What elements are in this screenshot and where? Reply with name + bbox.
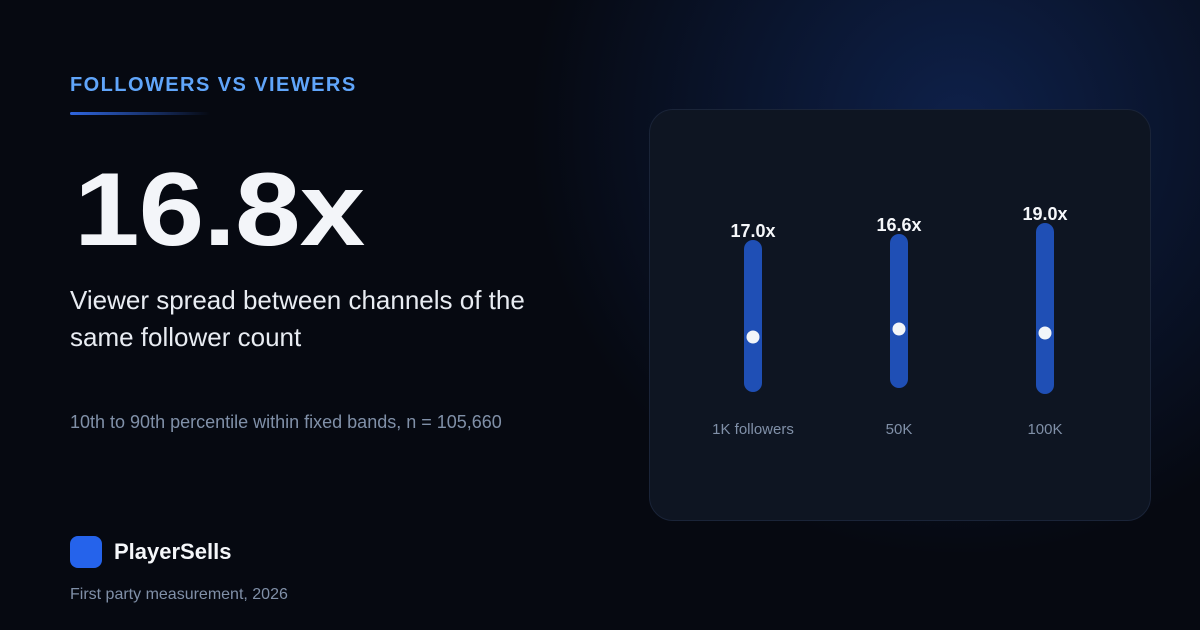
value label: 17.0x [730, 221, 776, 241]
axis label: 50K [886, 421, 912, 438]
headline stat: 16.8x [74, 152, 364, 268]
panel: spread chart [649, 109, 1151, 521]
brand name: PlayerSells [114, 539, 231, 564]
column: 50K [876, 215, 922, 438]
value label: 19.0x [1022, 204, 1068, 224]
subtitle: same follower count [70, 322, 301, 352]
subtitle [70, 284, 525, 352]
median dot [1038, 326, 1052, 340]
range bar [890, 234, 908, 388]
axis label: 100K [1027, 421, 1063, 438]
eyebrow heading: FOLLOWERS VS VIEWERS [70, 74, 357, 96]
eyebrow underline [70, 112, 210, 115]
range bar [1036, 223, 1054, 394]
column: 100K [1022, 204, 1068, 438]
median dot [892, 322, 906, 336]
subtitle: Viewer spread between channels of the [70, 284, 525, 314]
value label: 16.6x [876, 215, 922, 235]
icon: brand square [70, 536, 102, 568]
range bar [744, 240, 762, 392]
column: 1K followers [712, 221, 794, 438]
source line: First party measurement, 2026 [70, 586, 288, 603]
brand logo and name [70, 536, 231, 568]
axis label: 1K followers [712, 421, 794, 438]
median dot [746, 330, 760, 344]
methodology note: 10th to 90th percentile within fixed bands, n = 105,660 [70, 412, 502, 432]
